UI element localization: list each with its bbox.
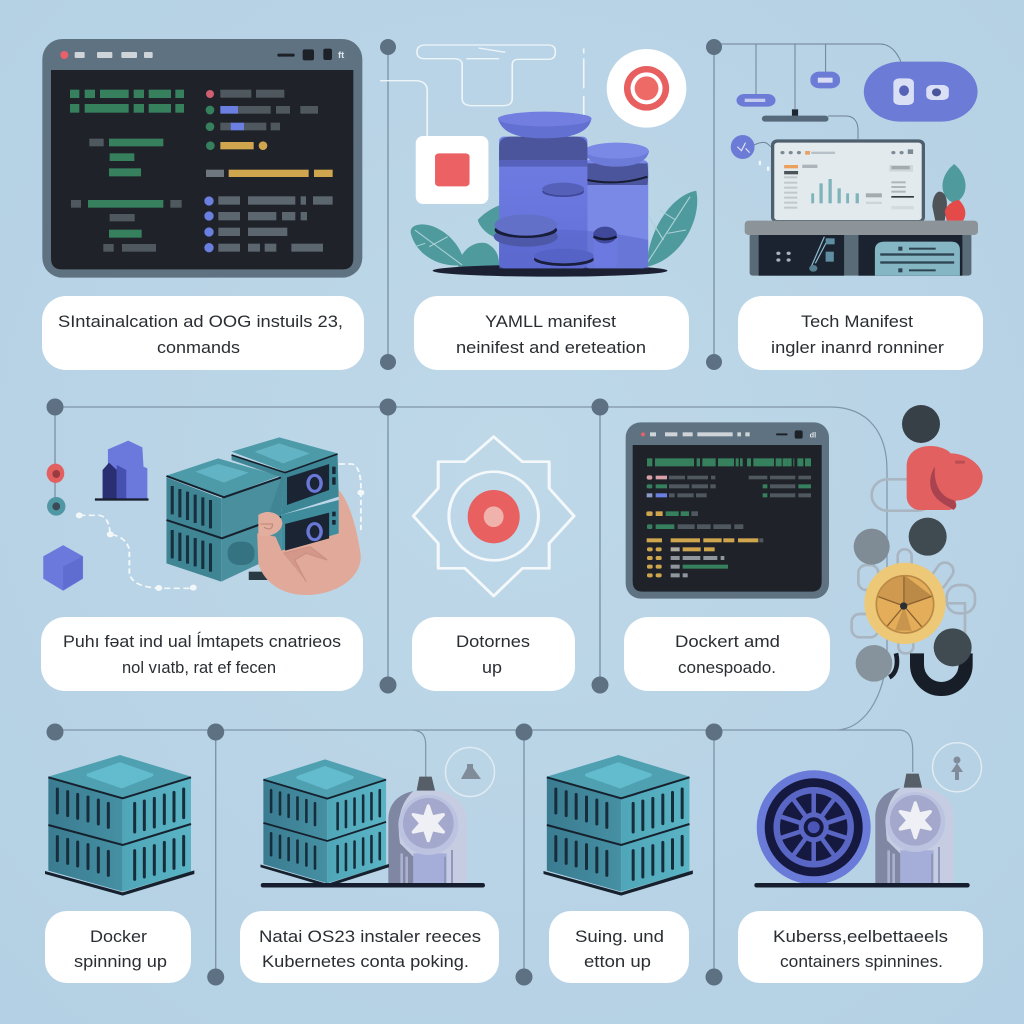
caption: step four: nol vıatb, rat ef fecen bbox=[122, 658, 276, 677]
caption: step five: Dotornes bbox=[456, 632, 530, 651]
blue jars bbox=[494, 112, 649, 268]
shadow bbox=[433, 265, 667, 277]
caption: step two bbox=[414, 296, 689, 370]
caption: natal installer: Natai OS23 instaler reeces bbox=[259, 927, 481, 946]
caption: step one: SIntainalcation ad OOG instuils 23, bbox=[58, 312, 343, 331]
server and machine illustration bbox=[261, 748, 494, 888]
server icon one bbox=[45, 755, 194, 896]
desk bbox=[745, 221, 978, 276]
caption: kubernetes containers: containers spinnines. bbox=[780, 952, 943, 971]
plant and vase bbox=[932, 164, 966, 221]
caption: kubernetes containers bbox=[738, 911, 983, 983]
caption: step one bbox=[42, 296, 364, 370]
panel: hand holding server bbox=[44, 437, 574, 596]
caption: natal installer bbox=[240, 911, 499, 983]
gear outline target bbox=[413, 437, 574, 596]
small blue badge bbox=[731, 135, 768, 170]
right server boxes bbox=[232, 437, 339, 551]
panel: terminal window two: dl bbox=[810, 430, 816, 439]
lower nodes bbox=[856, 628, 972, 682]
dark and gray nodes bbox=[854, 518, 947, 565]
panel: cluster of nodes and gear bbox=[852, 405, 983, 689]
gray outline petals bbox=[852, 479, 975, 653]
hand bbox=[257, 490, 361, 595]
blue cube bbox=[44, 546, 82, 590]
dark node top bbox=[902, 405, 940, 443]
large blue pill icon bbox=[864, 62, 978, 122]
caption: step three: ingler inanrd ronniner bbox=[771, 338, 944, 357]
wheel bbox=[757, 770, 871, 884]
caption: natal installer: Kubernetes conta poking. bbox=[262, 952, 469, 971]
wheel and machine illustration bbox=[754, 743, 982, 888]
status dots bbox=[47, 464, 65, 516]
caption: step four: Puhı fəat ind ual ĺmtapets cnatrieos bbox=[63, 632, 341, 651]
caption: kubernetes containers: Kuberss,eelbettaeels bbox=[773, 927, 948, 946]
caption: step five: up bbox=[482, 658, 502, 677]
white circuit outline bbox=[380, 45, 584, 136]
server icon two bbox=[543, 755, 693, 896]
small circle badge bbox=[932, 743, 982, 792]
timeline connectors and nodes bbox=[46, 39, 913, 986]
caption: step one: conmands bbox=[157, 338, 240, 357]
caption: docker spinning up: Docker bbox=[90, 927, 147, 946]
left server box bbox=[166, 458, 281, 582]
dashed path bbox=[76, 464, 364, 591]
caption: suing bbox=[549, 911, 689, 983]
caption: suing: etton up bbox=[584, 952, 651, 971]
caption: step six: conespoado. bbox=[678, 658, 776, 677]
panel: terminal window one: ft bbox=[338, 50, 344, 60]
gold wheel bbox=[864, 563, 946, 644]
red blob icon bbox=[907, 446, 983, 510]
caption: step three bbox=[738, 296, 983, 370]
panel: tech manifest dashboard bbox=[731, 62, 978, 276]
caption: step two: YAMLL manifest bbox=[485, 312, 616, 331]
caption: docker spinning up bbox=[45, 911, 191, 983]
caption: step four bbox=[41, 617, 363, 691]
caption: step two: neinifest and ereteation bbox=[456, 338, 646, 357]
leaves bbox=[411, 191, 697, 267]
panel: YAML manifest jars bbox=[380, 45, 697, 277]
caption: step three: Tech Manifest bbox=[801, 312, 913, 331]
caption: step six bbox=[624, 617, 830, 691]
thumb and fingers bbox=[258, 512, 327, 582]
panel: terminal window one bbox=[42, 39, 362, 278]
blue block icon bbox=[95, 441, 148, 501]
caption: step six: Dockert amd bbox=[675, 632, 780, 651]
caption: step five bbox=[412, 617, 575, 691]
laptop with chart bbox=[771, 139, 925, 223]
caption: suing: Suing. und bbox=[575, 927, 664, 946]
hanging bar bbox=[762, 109, 828, 122]
black ring bbox=[889, 653, 966, 689]
small blue pills bbox=[736, 72, 840, 107]
small circle badge bbox=[446, 748, 494, 796]
red square card bbox=[416, 136, 488, 204]
red target icon bbox=[607, 49, 686, 128]
caption: docker spinning up: spinning up bbox=[74, 952, 167, 971]
panel: terminal window two bbox=[626, 422, 829, 599]
